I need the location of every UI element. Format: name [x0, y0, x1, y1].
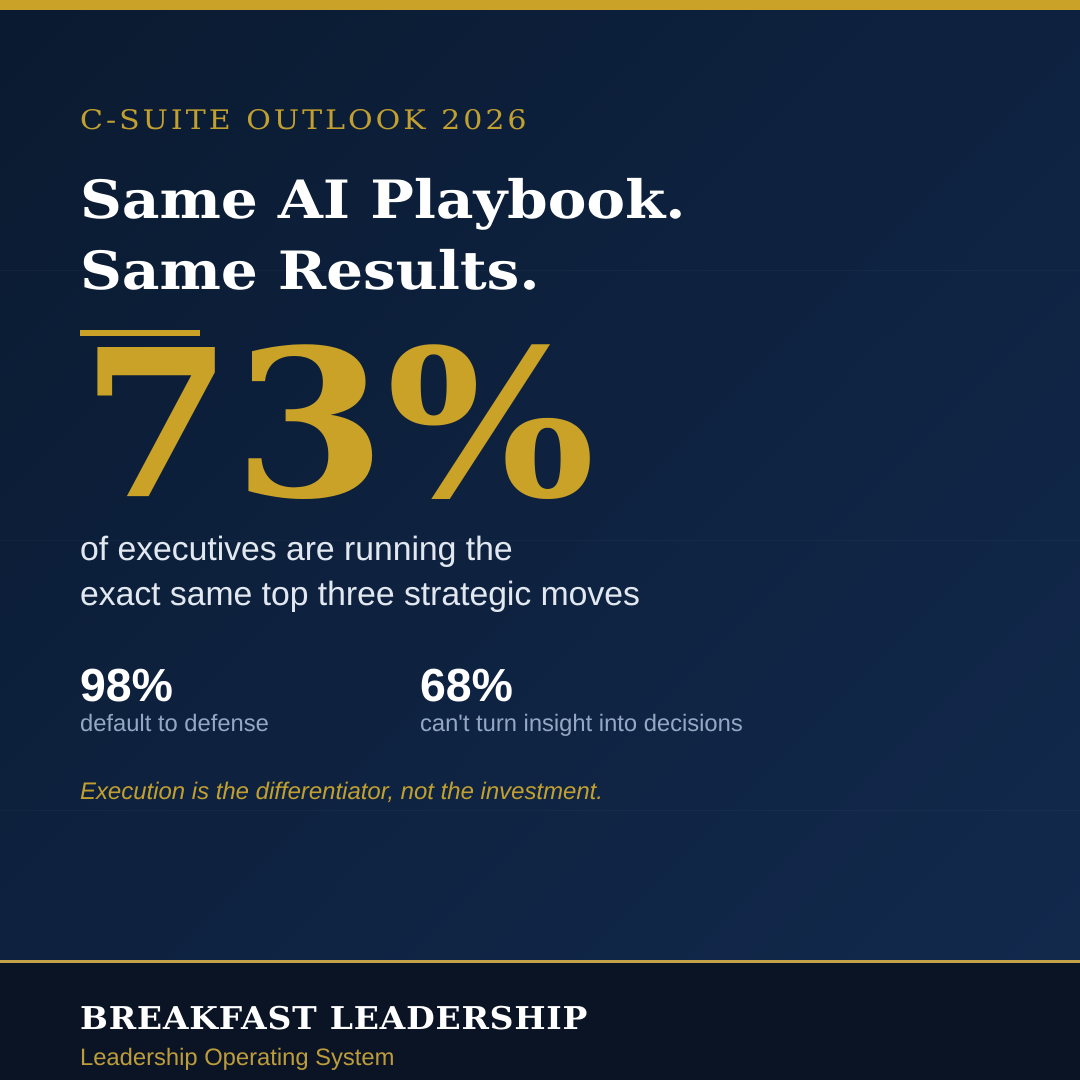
closing statement: Execution is the differentiator, not the investment.: [80, 778, 603, 805]
stat: 98%: [80, 659, 269, 737]
top gold bar: [0, 0, 1080, 10]
stat description: [80, 530, 640, 613]
value 98%: 98%: [80, 659, 173, 711]
value 68%: 68%: [420, 659, 513, 711]
footer: [0, 960, 1080, 1080]
title: [80, 168, 686, 301]
title line 2: Same Results.: [80, 239, 540, 301]
brand tagline: Leadership Operating System: [80, 1044, 394, 1071]
accent rule: [80, 330, 200, 336]
big stat 73%: 73%: [80, 304, 595, 544]
title line 1: Same AI Playbook.: [80, 168, 686, 230]
stat description: exact same top three strategic moves: [80, 575, 640, 613]
stat description: of executives are running the: [80, 530, 513, 568]
label default to defense: default to defense: [80, 710, 269, 737]
label insight: can't turn insight into decisions: [420, 710, 743, 737]
brand name: BREAKFAST LEADERSHIP: [80, 1000, 588, 1037]
eyebrow: C-SUITE OUTLOOK 2026: [80, 105, 530, 136]
stat: 68%: [420, 659, 743, 737]
